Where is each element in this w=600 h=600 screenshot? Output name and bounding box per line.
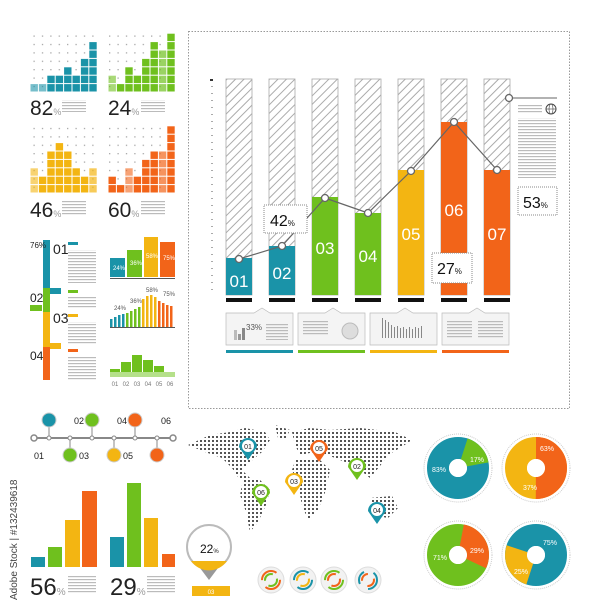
bar chart: 4 percentage bars: 75%	[163, 256, 176, 262]
horizontal timeline: 05	[123, 451, 133, 461]
donut 63/37: 37%	[523, 485, 537, 492]
callout 27%: 27%	[437, 261, 462, 278]
histogram: green	[110, 355, 175, 388]
pin 02	[348, 458, 366, 480]
horizontal timeline: 03	[79, 451, 89, 461]
column chart: thin bars: 24%	[114, 306, 127, 312]
horizontal timeline: 02	[74, 416, 84, 426]
panel: tile chart 46%	[30, 126, 98, 222]
donut 83/17: 17%	[470, 457, 484, 464]
small ring icons	[258, 567, 381, 593]
bar chart: 4 percentage bars: 36%	[130, 261, 143, 267]
panel: tile chart 46%: 46%	[30, 199, 61, 222]
world map dotted	[188, 425, 412, 532]
pin 01: 01	[244, 444, 252, 451]
pin 03: 03	[290, 479, 298, 486]
donut 75/25: 25%	[514, 569, 528, 576]
donut 83/17: 83%	[432, 467, 446, 474]
panel: main bar chart	[210, 79, 557, 302]
line chart	[236, 94, 557, 262]
pin gauge 22%	[187, 525, 231, 596]
panel: main bar chart: 04	[359, 247, 377, 266]
column chart: thin bars: 75%	[163, 292, 176, 298]
pin gauge 22%: 22%	[200, 542, 219, 556]
watermark text: Adobe Stock | #132439618	[9, 479, 20, 600]
mini panels row: 33%	[246, 323, 262, 332]
bar chart: 4 percentage bars	[110, 237, 176, 279]
mini panels row	[226, 308, 509, 353]
pin 06	[252, 484, 270, 506]
pin 05	[310, 440, 328, 462]
histogram: green: 03	[134, 382, 141, 388]
pin 04: 04	[373, 508, 381, 515]
horizontal timeline: 06	[161, 416, 171, 426]
callout 53%	[518, 187, 557, 215]
callout 42%	[264, 205, 307, 233]
donut 71/29: 71%	[433, 555, 447, 562]
panel: main bar chart: 05	[402, 225, 420, 244]
map pins	[239, 438, 386, 524]
panel: vertical timeline: 03	[53, 310, 69, 326]
pin 02: 02	[353, 464, 361, 471]
bar chart: 4 percentage bars: 24%	[113, 266, 126, 272]
pin 04	[368, 502, 386, 524]
column chart: thin bars: 36%	[130, 299, 143, 305]
bar chart: 4 percentage bars: 58%	[146, 254, 159, 260]
pin 05: 05	[315, 446, 323, 453]
panel: vertical timeline	[30, 240, 96, 380]
horizontal timeline: 04	[117, 416, 127, 426]
donut 71/29: 29%	[470, 548, 484, 555]
histogram: green: 02	[123, 382, 130, 388]
callout 42%: 42%	[270, 213, 295, 230]
panel: main bar chart: 06	[445, 201, 463, 220]
horizontal timeline: 01	[34, 451, 44, 461]
panel: tile chart 24%: 24%	[108, 97, 139, 120]
text block with globe icon	[518, 104, 556, 178]
panel: main bar chart: 03	[316, 239, 334, 258]
histogram: green: 06	[167, 382, 174, 388]
histogram: green: 01	[112, 382, 119, 388]
pin gauge 22%: 03	[208, 590, 215, 596]
panel: vertical timeline: 02	[30, 291, 44, 305]
bar chart 29%	[110, 483, 175, 600]
column chart: thin bars: 58%	[146, 288, 159, 294]
panel: tile chart 24%	[108, 32, 176, 120]
callout 53%: 53%	[523, 195, 548, 212]
donut 71/29	[424, 521, 492, 589]
panel: vertical timeline: 76%	[30, 241, 46, 250]
histogram: green: 05	[156, 382, 163, 388]
panel: main bar chart: 01	[230, 272, 248, 291]
panel: main bar chart: 02	[273, 264, 291, 283]
donut 75/25: 75%	[543, 540, 557, 547]
panel: tile chart 82%: 82%	[30, 97, 61, 120]
panel: vertical timeline: 01	[53, 241, 69, 257]
dotted frame	[188, 32, 570, 408]
donut 63/37	[502, 434, 570, 502]
panel: main bar chart: 07	[488, 225, 506, 244]
callout 27%	[432, 253, 472, 283]
bar chart 56%	[30, 491, 97, 600]
panel: tile chart 82%	[30, 32, 98, 120]
donut 83/17	[424, 434, 492, 502]
pin 06: 06	[257, 490, 265, 497]
panel: vertical timeline: 04	[30, 349, 44, 363]
panel: tile chart 60%	[108, 126, 176, 222]
pin 01	[239, 438, 257, 460]
donut 63/37: 63%	[540, 446, 554, 453]
donut 75/25	[502, 521, 570, 589]
column chart: thin bars	[110, 288, 176, 328]
histogram: green: 04	[145, 382, 152, 388]
horizontal timeline	[31, 413, 176, 462]
panel: tile chart 60%: 60%	[108, 199, 139, 222]
pin 03	[285, 473, 303, 495]
